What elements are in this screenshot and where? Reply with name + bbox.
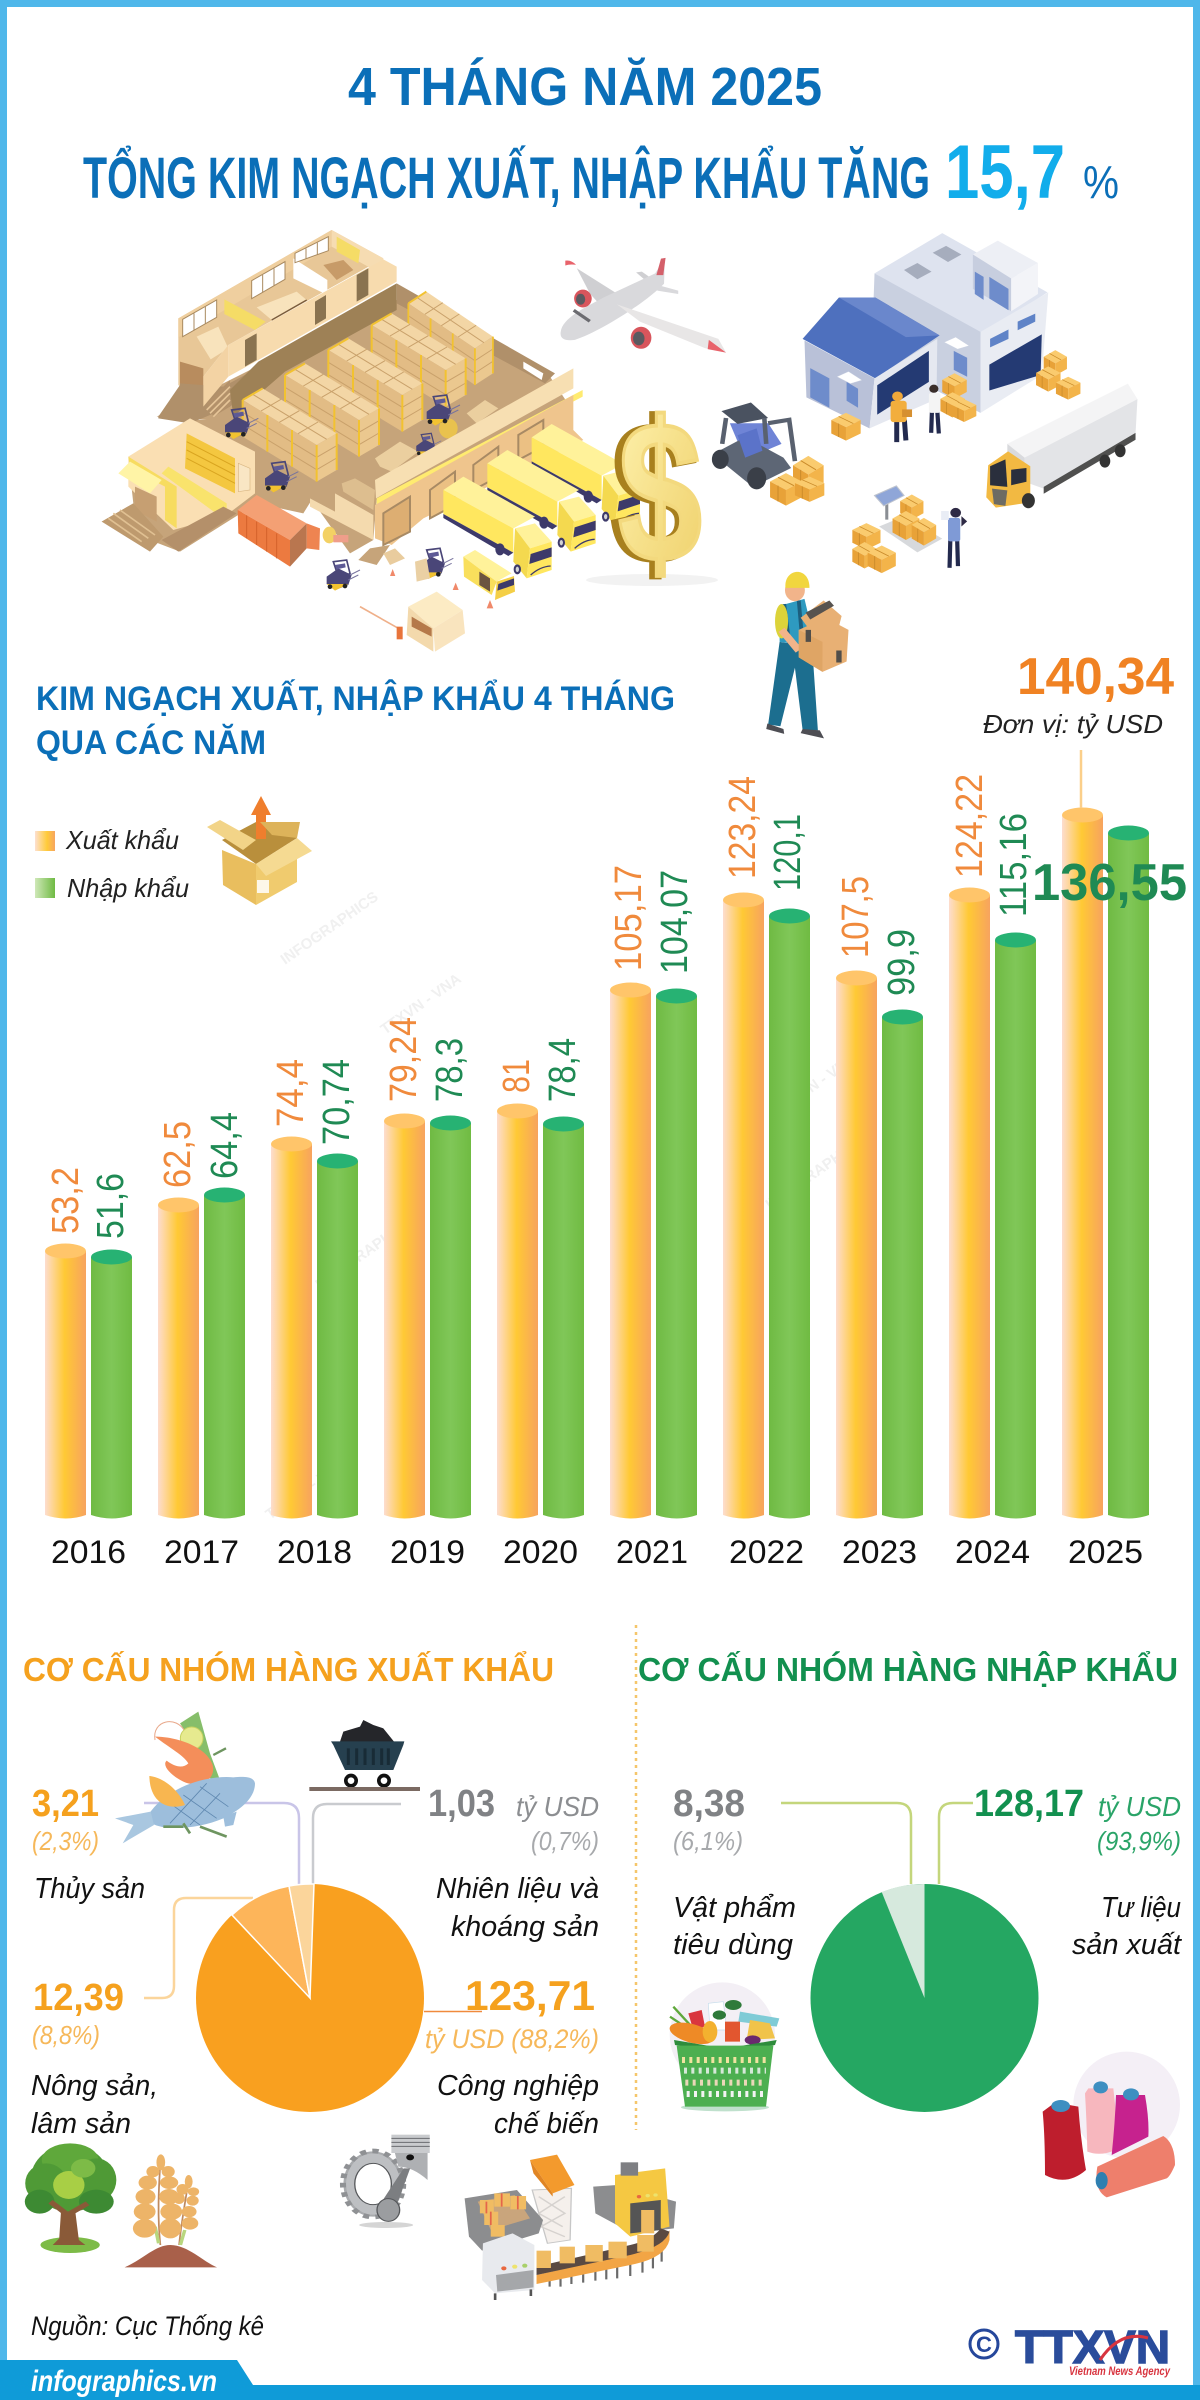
label: fuel and minerals: Nhiên liệu và — [436, 1873, 599, 1905]
pie chart: export — [196, 1884, 424, 2112]
label: agriculture and forestry: (8,8%) — [32, 2020, 100, 2050]
boxes and cones — [358, 545, 390, 565]
label: agriculture and forestry — [31, 1977, 158, 2140]
watermarks: INFOGRAPHICS — [313, 1213, 417, 1293]
watermarks: TTXVN - VNA — [378, 970, 465, 1038]
label: consumer goods: Vật phẩm — [673, 1892, 796, 1924]
bars 2021 — [610, 982, 697, 1518]
year labels: 2020 — [503, 1534, 578, 1570]
label: fuel and minerals: 1,03 — [428, 1783, 495, 1825]
value labels: 124,22 — [949, 774, 991, 878]
icon: seafood — [115, 1712, 255, 1843]
label: agriculture and forestry: 12,39 — [33, 1977, 124, 2019]
value labels: 53,2 — [45, 1167, 87, 1234]
bars 2016 — [45, 1244, 132, 1518]
bar chart — [45, 774, 1149, 1570]
icon: open box with arrow — [207, 796, 312, 905]
value labels: 105,17 — [608, 865, 650, 971]
icon: thread spools — [1043, 2052, 1180, 2197]
heading: import structure: CƠ CẤU NHÓM HÀNG NHẬP KHẨU — [638, 1651, 1178, 1688]
illustration: worker carrying boxes — [766, 572, 849, 738]
watermarks: INFOGRAPHICS — [278, 888, 382, 968]
centre building — [871, 233, 1048, 413]
section heading: chart: QUA CÁC NĂM — [36, 724, 266, 762]
year labels: 2017 — [164, 1534, 239, 1570]
callout: 2025 export — [983, 648, 1174, 808]
warehouse floor — [102, 300, 570, 553]
icon: grocery basket — [667, 1982, 779, 2111]
value labels: 74,4 — [270, 1059, 312, 1127]
heading: export structure: CƠ CẤU NHÓM HÀNG XUẤT KHẨU — [23, 1651, 554, 1688]
illustration: logistics centre — [712, 233, 1137, 573]
label: seafood: 3,21 — [32, 1783, 99, 1825]
year labels: 2016 — [51, 1534, 126, 1570]
callout: 2025 export: 140,34 — [1017, 648, 1174, 706]
label: agriculture and forestry: lâm sản — [31, 2108, 131, 2140]
value labels: 107,5 — [835, 876, 877, 958]
label: consumer goods: (6,1%) — [673, 1826, 743, 1856]
logo: TTXVN — [970, 2321, 1170, 2378]
value labels: 79,24 — [383, 1017, 425, 1102]
label: consumer goods: tiêu dùng — [673, 1929, 793, 1961]
delivery van — [463, 550, 515, 600]
truck — [986, 384, 1137, 508]
forklift — [712, 403, 795, 489]
office wing — [158, 230, 397, 423]
value labels — [45, 774, 1035, 1239]
label: seafood — [32, 1783, 145, 1905]
blue-roof hall — [803, 297, 940, 428]
label: consumer goods: 8,38 — [673, 1783, 745, 1825]
callout: 2025 export: Đơn vị: tỷ USD — [983, 709, 1163, 739]
pie chart: import — [810, 1884, 1038, 2112]
label: fuel and minerals: tỷ USD — [516, 1791, 599, 1822]
illustration: dollar sign: $ — [611, 382, 699, 605]
value labels: 70,74 — [316, 1059, 358, 1145]
title: 4 THÁNG NĂM 2025 — [348, 57, 822, 117]
small figures — [891, 385, 967, 568]
watermarks: TTXVN - VNA — [773, 1050, 860, 1118]
callout: 2025 import: 136,55 — [1032, 854, 1187, 912]
label: processing industry: tỷ USD (88,2%) — [425, 2024, 599, 2054]
icon: coal cart — [309, 1720, 420, 1791]
illustration: airplane — [561, 258, 726, 353]
label: production materials: 128,17 — [974, 1783, 1084, 1825]
icon: wheat plant — [125, 2154, 217, 2267]
footer bar: infographics.vn — [31, 2365, 217, 2398]
shop front — [102, 418, 255, 552]
title: 15,7 — [945, 130, 1065, 215]
bars 2018 — [271, 1136, 358, 1518]
panel: export structure — [23, 1651, 676, 2300]
source note: Nguồn: Cục Thống kê — [31, 2311, 264, 2341]
value labels: 115,16 — [993, 813, 1035, 917]
value labels: 104,07 — [654, 870, 696, 974]
logo: TTXVN: C — [976, 2332, 992, 2357]
value labels: 64,4 — [204, 1112, 246, 1179]
legend — [35, 825, 189, 903]
label: fuel and minerals — [428, 1783, 599, 1943]
value labels: 78,3 — [429, 1038, 471, 1102]
label: production materials: tỷ USD — [1098, 1791, 1181, 1822]
storage racks — [408, 292, 493, 385]
year labels: 2024 — [955, 1534, 1030, 1570]
watermarks: TTXVN - VNA — [263, 1455, 350, 1523]
leader lines — [144, 1803, 482, 2012]
label: production materials: (93,9%) — [1097, 1826, 1181, 1856]
panel: import structure — [638, 1651, 1183, 2197]
label: seafood: (2,3%) — [32, 1826, 99, 1856]
label: production materials: Tư liệu — [1101, 1892, 1181, 1924]
section heading: chart — [36, 680, 675, 762]
label: seafood: Thủy sản — [34, 1873, 145, 1905]
bars 2024 — [949, 888, 1036, 1518]
value labels: 123,24 — [722, 776, 764, 879]
label: processing industry: chế biến — [494, 2108, 599, 2140]
label: fuel and minerals: khoáng sản — [451, 1911, 599, 1943]
panel divider — [635, 1625, 637, 2130]
label: consumer goods — [673, 1783, 796, 1961]
year labels: 2019 — [390, 1534, 465, 1570]
bars 2019 — [384, 1114, 471, 1518]
illustration: warehouse cutaway — [102, 230, 640, 652]
value labels: 78,4 — [542, 1038, 584, 1102]
value labels: 81 — [496, 1059, 538, 1093]
leader lines — [781, 1803, 973, 1884]
watermarks — [263, 888, 867, 1523]
value labels: 62,5 — [157, 1121, 199, 1188]
year labels: 2021 — [616, 1534, 688, 1570]
value labels: 120,1 — [767, 814, 809, 891]
label: processing industry: 123,71 — [465, 1972, 595, 2019]
back walls — [230, 283, 397, 417]
label: fuel and minerals: (0,7%) — [531, 1826, 599, 1856]
title — [83, 57, 1119, 215]
bars 2025 — [1062, 808, 1149, 1518]
section heading: chart: KIM NGẠCH XUẤT, NHẬP KHẨU 4 THÁNG — [36, 680, 675, 718]
bars 2023 — [836, 970, 923, 1518]
value labels: 99,9 — [881, 929, 923, 996]
forklifts — [265, 462, 298, 492]
icon: tree — [25, 2143, 116, 2253]
box stacks — [942, 373, 967, 399]
loose pallets — [375, 442, 418, 472]
legend: Xuất khẩu — [65, 825, 179, 855]
year labels: 2025 — [1068, 1534, 1143, 1570]
loading wall — [375, 368, 573, 498]
trucks — [532, 424, 640, 526]
shipping container — [238, 495, 348, 567]
watermarks: INFOGRAPHICS — [763, 1133, 867, 1213]
logo: TTXVN: Vietnam News Agency — [1069, 2366, 1170, 2378]
logo: TTXVN: TTXVN — [1015, 2321, 1170, 2373]
label: production materials — [974, 1783, 1183, 1961]
footer bar — [0, 2360, 1200, 2400]
scale with boxes — [875, 486, 942, 552]
label: agriculture and forestry: Nông sản, — [31, 2070, 158, 2102]
legend: Nhập khẩu — [67, 873, 189, 903]
icon: conveyor factory — [465, 2155, 676, 2300]
year labels: 2018 — [277, 1534, 352, 1570]
title: % — [1083, 156, 1119, 208]
label: processing industry — [425, 1972, 599, 2140]
illustration: dollar sign: $ — [618, 381, 702, 604]
year labels: 2023 — [842, 1534, 917, 1570]
bars 2022 — [723, 892, 810, 1518]
year labels: 2022 — [729, 1534, 804, 1570]
icon: gear and piston — [343, 2135, 430, 2228]
label: production materials: sản xuất — [1072, 1929, 1183, 1961]
year labels — [51, 1534, 1143, 1570]
value labels: 51,6 — [90, 1173, 132, 1239]
bars 2017 — [158, 1188, 245, 1518]
label: processing industry: Công nghiệp — [437, 2070, 599, 2102]
bars 2020 — [497, 1104, 584, 1518]
guard booth — [360, 592, 465, 652]
